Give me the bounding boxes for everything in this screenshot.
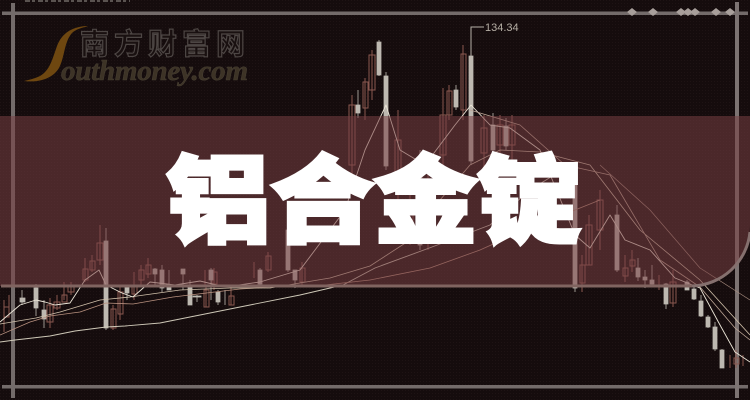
moving average lines [0, 105, 750, 362]
watermark logo [24, 21, 248, 87]
band corner highlight [692, 232, 750, 286]
marker diamonds on top axis [627, 8, 735, 16]
watermark logo: outhmoney.com [61, 55, 248, 87]
translucent title band [0, 116, 750, 286]
price label 134.34: 134.34 [485, 22, 519, 34]
band baseline [1, 284, 692, 288]
candlestick chart: hollow red candles [4, 45, 743, 368]
price label 134.34 [471, 22, 519, 56]
title: 铝合金锭 [167, 125, 581, 262]
watermark logo: 南方财富网 [80, 21, 245, 63]
candlestick chart: solid grey candles [20, 40, 724, 368]
